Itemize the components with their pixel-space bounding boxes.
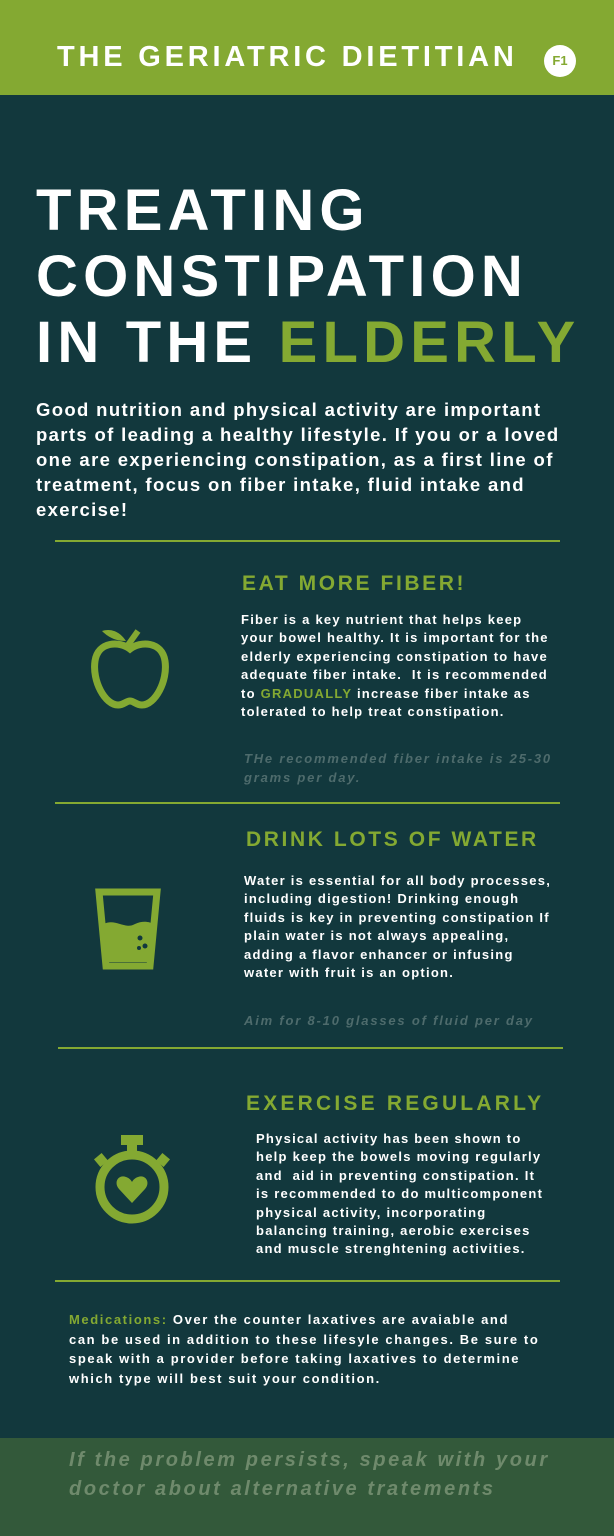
footer text: doctor about alternative tratements [69,1478,496,1500]
body text: elderly experiencing constipation to have [241,649,548,664]
logo badge: F1 [552,53,568,68]
intro text: Good nutrition and physical activity are important [36,399,541,420]
main title [36,178,580,375]
main title: CONSTIPATION [36,244,528,309]
body text [256,1131,543,1256]
medications note: speak with a provider before taking laxatives to determine [69,1351,520,1366]
body text: plain water is not always appealing, [244,928,509,943]
icon: apple [91,629,169,708]
intro text: one are experiencing constipation, as a first line of [36,449,554,470]
body text: fluids is key in preventing constipation If [244,910,550,925]
body text [241,612,549,719]
header title: THE GERIATRIC DIETITIAN [57,41,518,73]
icon: glass [95,888,161,970]
body text: and muscle strenghtening activities. [256,1241,526,1256]
intro text: treatment, focus on fiber intake, fluid intake and [36,474,525,495]
footer text: If the problem persists, speak with your [69,1449,550,1471]
body text: help keep the bowels moving regularly [256,1149,541,1164]
body text: adequate fiber intake. It is recommended [241,667,548,682]
section: fiber [91,572,552,785]
medications note: Medications: Over the counter laxatives are avaiable and [69,1312,509,1327]
body text: to GRADUALLY increase fiber intake as [241,686,531,701]
note: THe recommended fiber intake is 25-30 [244,751,552,766]
body text: including digestion! Drinking enough [244,891,519,906]
section: exercise [94,1092,544,1256]
medications note [69,1312,539,1386]
footer band [0,1438,614,1536]
body text [244,873,551,980]
intro text: exercise! [36,499,128,520]
body text: tolerated to help treat constipation. [241,704,505,719]
note: Aim for 8-10 glasses of fluid per day [244,1013,534,1028]
heading: EXERCISE REGULARLY [246,1092,544,1115]
section: water [95,828,551,1028]
main title: IN THE ELDERLY [36,310,580,375]
body text: your bowel healthy. It is important for the [241,630,549,645]
medications note: which type will best suit your condition. [69,1370,381,1386]
medications note: can be used in addition to these lifesyle changes. Be sure to [69,1332,539,1346]
body text: water with fruit is an option. [244,965,454,980]
body text: Physical activity has been shown to [256,1131,522,1146]
note [244,751,552,785]
header bar [0,0,614,95]
footer text [69,1449,550,1500]
main title: TREATING [36,178,370,243]
icon: stopwatch [94,1135,170,1224]
body text: is recommended to do multicomponent [256,1186,543,1201]
note: grams per day. [244,770,361,785]
body text: Water is essential for all body processes, [244,873,551,888]
body text: and aid in preventing constipation. It [256,1168,535,1183]
logo badge [544,45,576,77]
heading: DRINK LOTS OF WATER [246,828,539,851]
intro text [36,399,560,520]
body text: physical activity, incorporating [256,1205,486,1220]
heading: EAT MORE FIBER! [242,572,466,595]
body text: balancing training, aerobic exercises [256,1223,531,1238]
body text: adding a flavor enhancer or infusing [244,947,514,962]
intro text: parts of leading a healthy lifestyle. If you or a loved [36,424,560,445]
body text: Fiber is a key nutrient that helps keep [241,612,522,627]
